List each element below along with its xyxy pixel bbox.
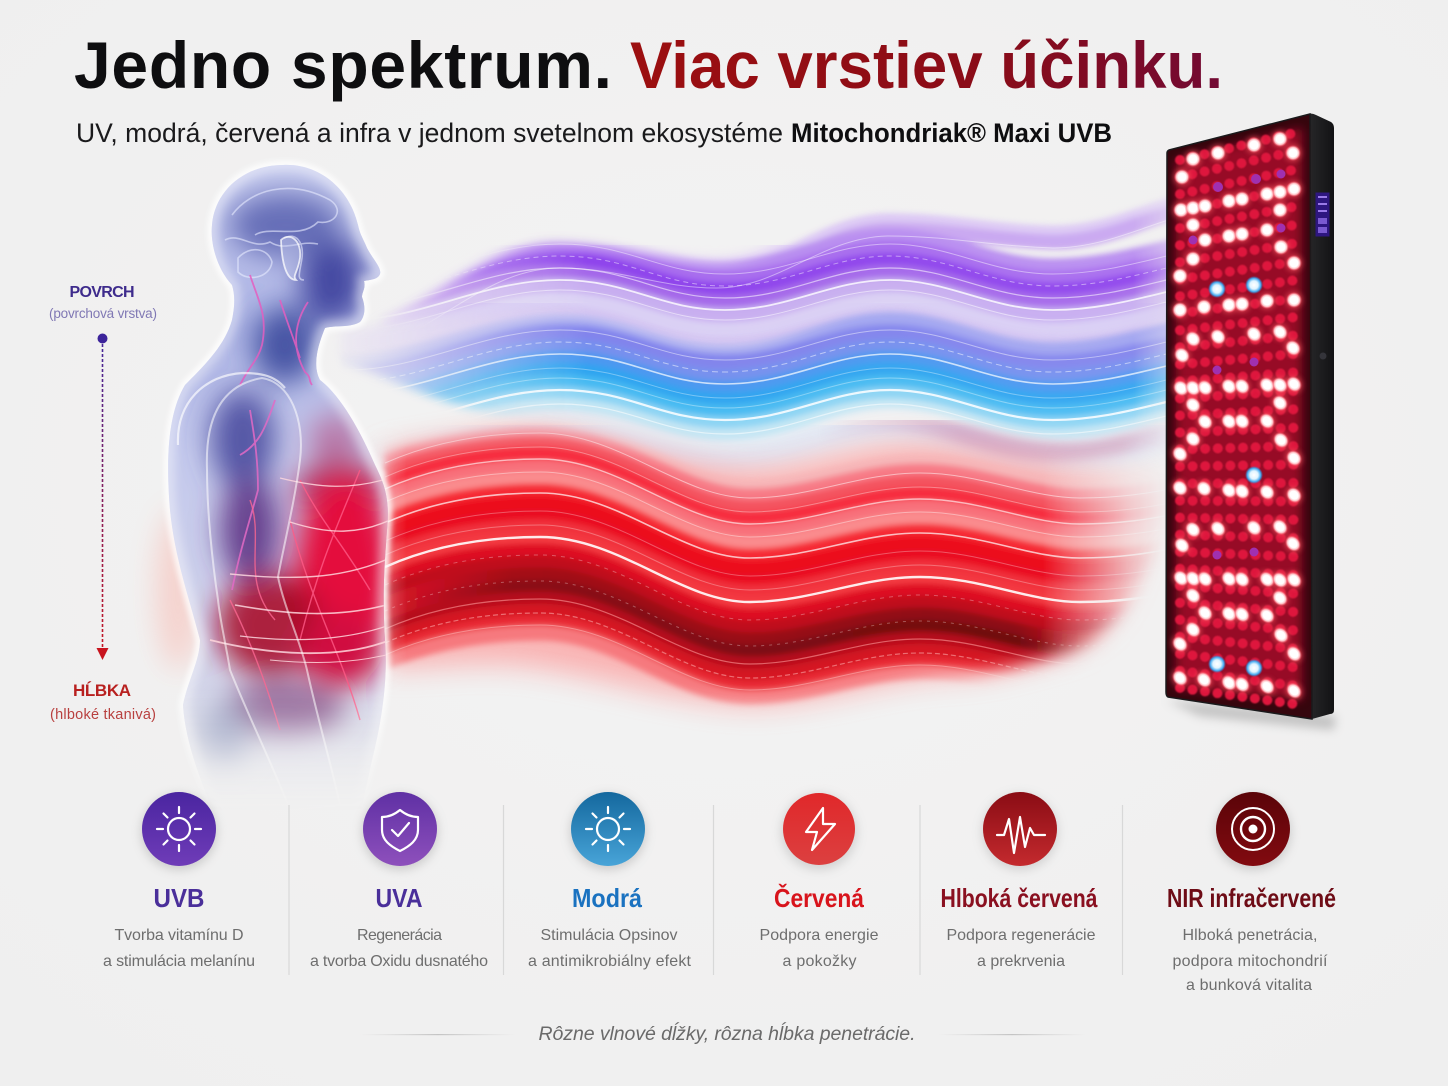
footer tagline: Rôzne vlnové dĺžky, rôzna hĺbka penetrácie. <box>538 1021 916 1045</box>
red glow behind body <box>156 510 200 670</box>
item: UVB <box>103 792 255 970</box>
LED light panel <box>1166 114 1336 730</box>
brain folds <box>225 188 337 280</box>
label: depth <box>50 681 156 723</box>
item: UVA: a tvorba Oxidu dusnatého <box>310 953 488 970</box>
title <box>74 28 1223 102</box>
item: Červená: a pokožky <box>782 953 856 970</box>
label: surface: POVRCH <box>70 284 134 301</box>
item: Hlboká červená: Podpora regenerácie <box>946 927 1096 944</box>
panel shadow <box>1166 700 1336 730</box>
subtitle: Mitochondriak® Maxi UVB <box>791 118 1112 148</box>
item: UVA: Regenerácia <box>357 927 442 944</box>
label: surface <box>49 284 157 321</box>
item: UVA: UVA <box>376 883 423 913</box>
item: UVA <box>310 792 488 970</box>
label: depth: (hlboké tkanivá) <box>50 707 156 723</box>
ear <box>281 237 300 280</box>
item: NIR infračervené: a bunková vitalita <box>1186 977 1312 994</box>
item: NIR infračervené <box>1167 792 1336 994</box>
subtitle <box>76 118 1112 148</box>
panel: wavelength legend <box>103 792 1336 994</box>
item: Modrá: Modrá <box>572 883 642 913</box>
light waves: spectrum streams from panel to body <box>340 195 1176 705</box>
subtitle: UV, modrá, červená a infra v jednom svetelnom ekosystéme <box>76 118 783 148</box>
body silhouette <box>168 165 395 815</box>
title: Viac vrstiev účinku. <box>630 28 1223 102</box>
display <box>1316 192 1330 236</box>
title: Jedno spektrum. <box>74 28 612 102</box>
item: Červená: Podpora energie <box>760 927 879 944</box>
depth axis <box>49 284 157 723</box>
horizontal light strands through torso <box>210 478 390 662</box>
item: Modrá: Stimulácia Opsinov <box>540 927 678 944</box>
wave band: red, deep red and NIR <box>380 422 1176 705</box>
item: NIR infračervené: Hlboká penetrácia, <box>1182 927 1318 944</box>
depth arrow <box>96 334 108 660</box>
item: NIR infračervené: NIR infračervené <box>1167 883 1336 913</box>
red glow <box>1176 128 1302 700</box>
shoulder cap <box>178 373 285 445</box>
red bloom <box>380 431 1176 705</box>
item: Červená: Červená <box>774 883 864 913</box>
white LED halo <box>1172 131 1302 710</box>
item: Modrá: a antimikrobiálny efekt <box>528 953 692 970</box>
item: Hlboká červená: a prekrvenia <box>977 953 1065 970</box>
veins <box>232 275 312 590</box>
item: Červená <box>760 793 879 970</box>
button <box>1320 352 1326 360</box>
item: NIR infračervené: podpora mitochondrií <box>1172 953 1328 970</box>
violet LEDs <box>1188 170 1286 560</box>
item: UVB: a stimulácia melanínu <box>103 953 255 970</box>
item: Hlboká červená: Hlboká červená <box>940 883 1098 913</box>
label: surface: (povrchová vrstva) <box>49 306 157 321</box>
arm <box>206 377 330 762</box>
wave band: UV purple and blue <box>340 202 1175 458</box>
mauve haze between blue and red <box>340 420 1175 460</box>
blue stream <box>340 318 1175 458</box>
label: depth: HĹBKA <box>73 681 131 700</box>
wave haze underlays <box>346 245 1166 468</box>
blue LEDs <box>1208 276 1263 677</box>
item: UVB: UVB <box>154 883 204 913</box>
panel side <box>1310 114 1334 719</box>
white LEDs <box>1172 131 1302 710</box>
head edge highlight <box>168 165 388 815</box>
item: Hlboká červená <box>940 792 1098 970</box>
item: Modrá <box>528 792 692 970</box>
panel face <box>1166 114 1312 719</box>
item: UVB: Tvorba vitamínu D <box>114 927 244 944</box>
purple stream <box>390 197 1166 336</box>
red LED grid <box>1180 133 1294 704</box>
human figure <box>156 165 395 815</box>
